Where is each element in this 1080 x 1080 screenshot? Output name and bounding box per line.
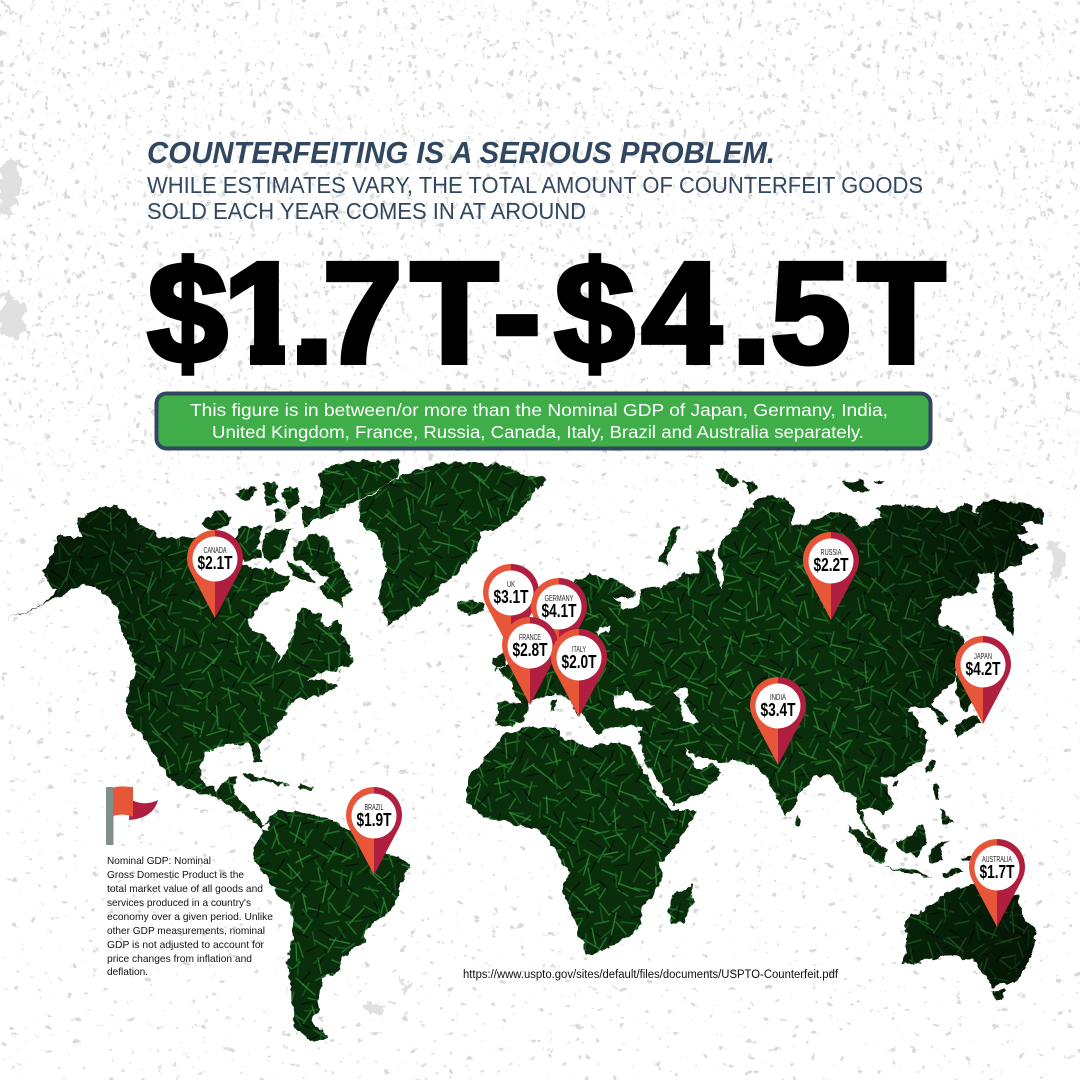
pin: Brazil (346, 787, 402, 875)
callout: GDP comparison: United Kingdom, France, Russia, Canada, Italy, Brazil and Australia separately. (212, 422, 864, 442)
pin: France: $2.8T (512, 640, 548, 660)
text block: nominal GDP definition (107, 855, 273, 978)
title: counterfeiting is a serious problem: COUNTERFEITING IS A SERIOUS PROBLEM. (147, 135, 775, 170)
pin: UK: $3.1T (494, 587, 529, 607)
pin: Russia (803, 532, 859, 620)
text block: nominal GDP definition: Gross Domestic Product is the (107, 869, 244, 881)
pin: France (502, 617, 558, 705)
icon: flag (106, 786, 158, 845)
pin: Australia (969, 839, 1025, 927)
subtitle: SOLD EACH YEAR COMES IN AT AROUND (147, 198, 586, 224)
pin: France: FRANCE (519, 633, 541, 642)
pin: Australia: $1.7T (980, 862, 1015, 882)
pin: India: INDIA (770, 693, 786, 702)
callout: GDP comparison: This figure is in between/or more than the Nominal GDP of Japan, Germany, India, (190, 400, 888, 420)
pin: Canada: CANADA (204, 546, 227, 555)
pin: Germany (531, 578, 587, 666)
pin: Russia: RUSSIA (820, 548, 842, 557)
pin: Canada: $2.1T (198, 553, 233, 573)
pin: India: $3.4T (760, 700, 796, 720)
subtitle (147, 172, 923, 224)
text block: nominal GDP definition: total market value of all goods and (107, 883, 263, 895)
text block: nominal GDP definition: other GDP measurements, nominal (107, 925, 265, 937)
text block: nominal GDP definition: GDP is not adjusted to account for (107, 939, 264, 951)
pin: Japan (955, 636, 1011, 724)
pin: UK: UK (507, 580, 515, 589)
pin: Italy: ITALY (572, 645, 586, 654)
text block: nominal GDP definition: deflation. (107, 966, 148, 978)
text block: nominal GDP definition: services produced in a country's (107, 897, 251, 909)
text block: nominal GDP definition: Nominal GDP: Nominal (107, 855, 211, 867)
source url: https://www.uspto.gov/sites/default/files/documents/USPTO-Counterfeit.pdf (463, 969, 839, 981)
text block: nominal GDP definition: economy over a given period. Unlike (107, 911, 273, 923)
headline figure: $1.7T-$4.5T (148, 232, 945, 394)
pin: Japan: $4.2T (966, 659, 1001, 679)
pin: Italy: $2.0T (562, 652, 597, 672)
pin: Canada (187, 530, 243, 618)
world map with grass texture (0, 450, 1080, 1060)
callout: GDP comparison (156, 394, 930, 448)
pin: Germany: GERMANY (544, 594, 574, 603)
pin: Japan: JAPAN (974, 652, 992, 661)
pin: Brazil: BRAZIL (364, 803, 384, 812)
pin: Australia: AUSTRALIA (982, 855, 1012, 864)
pin: Germany: $4.1T (542, 601, 577, 621)
text block: nominal GDP definition: price changes from inflation and (107, 953, 252, 965)
pin: UK (483, 564, 539, 652)
pin: Brazil: $1.9T (356, 810, 392, 830)
pin: India (750, 677, 806, 765)
pin: Italy (551, 629, 607, 717)
subtitle: WHILE ESTIMATES VARY, THE TOTAL AMOUNT OF COUNTERFEIT GOODS (147, 172, 923, 198)
pin: Russia: $2.2T (814, 555, 849, 575)
